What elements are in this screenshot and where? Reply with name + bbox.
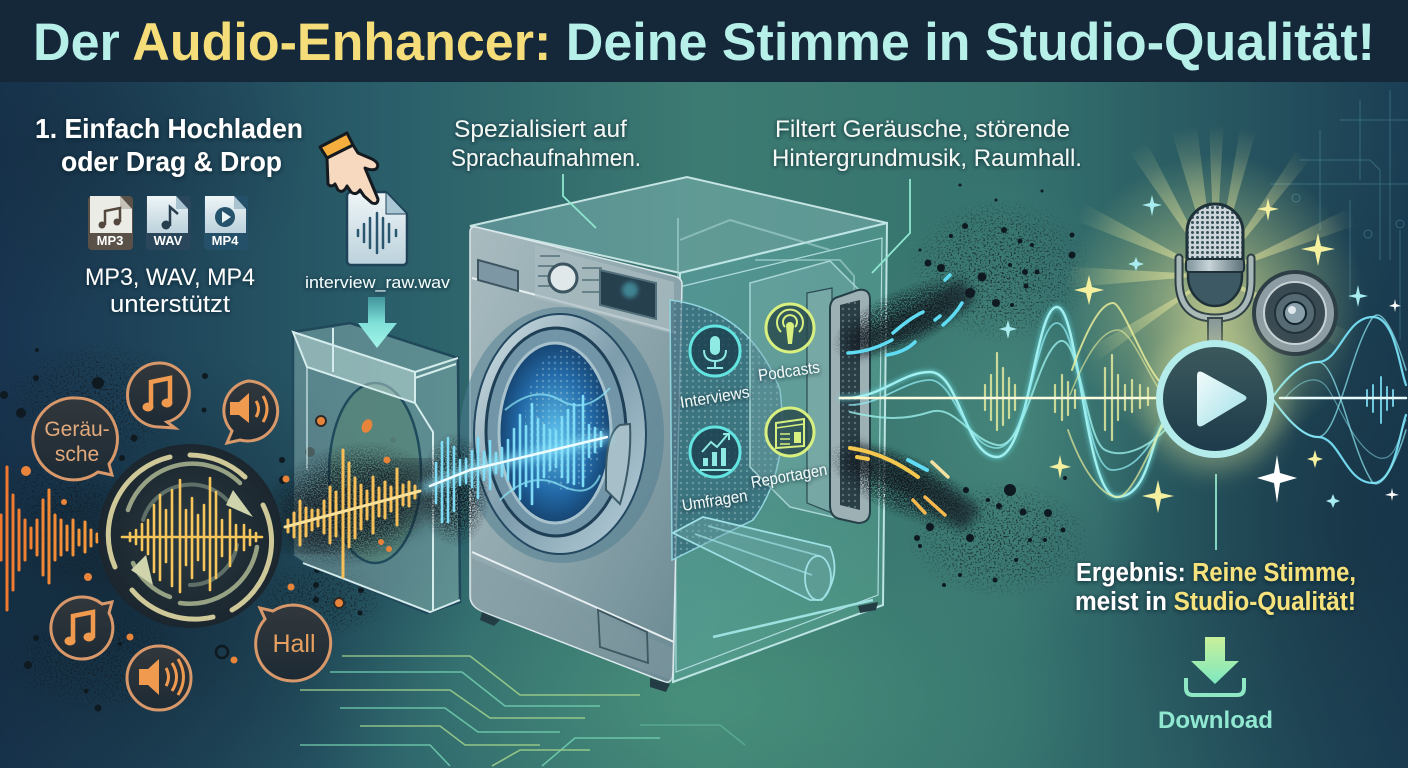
drum mesh	[670, 300, 782, 560]
bubble: Geräusche: sche	[55, 443, 99, 466]
filter unit	[750, 261, 870, 523]
icon: podcasts	[766, 304, 814, 352]
waveform: through machine	[285, 396, 607, 577]
bubble: music lower	[51, 597, 113, 659]
category labels: Reportagen	[750, 461, 829, 492]
icon: WAV: WAV	[154, 233, 183, 248]
circuit lines bottom	[300, 656, 745, 766]
callout: speech recordings: Spezialisiert auf	[454, 116, 627, 143]
orange noise dots	[21, 416, 392, 664]
machine feet	[480, 602, 878, 692]
washing machine	[460, 177, 887, 692]
icon: central noise disc	[98, 444, 282, 628]
drawer at bottom	[598, 610, 648, 663]
file format icons	[88, 196, 248, 250]
icon: download	[1186, 637, 1244, 695]
black splatter dots	[0, 184, 1076, 712]
text: supported formats	[85, 264, 255, 318]
callout: filter noise: Hintergrundmusik, Raumhall.	[772, 145, 1082, 172]
leader lines	[563, 174, 1216, 550]
transparent input box	[293, 323, 460, 613]
door	[460, 307, 664, 563]
dark smudge bands	[290, 290, 972, 530]
drum	[670, 300, 782, 560]
title bar: Der Audio-Enhancer: Deine Stimme in Studio-Qualität!	[33, 13, 1375, 72]
icon: reports	[766, 408, 814, 456]
download label: Download	[1158, 707, 1273, 734]
title bar	[0, 0, 1408, 82]
bubble: speaker lower	[127, 646, 191, 710]
icon: WAV	[146, 196, 191, 250]
result text	[1075, 559, 1356, 616]
dense grain smudges	[32, 278, 980, 578]
glow rays	[1040, 100, 1385, 455]
waveform: orange left	[0, 467, 98, 610]
bubble: Geräusche	[33, 398, 118, 480]
icon: pointing hand	[320, 133, 378, 204]
bubble: Hall	[256, 605, 331, 681]
grain splatter	[8, 200, 1088, 708]
bubble: Hall: Hall	[272, 630, 316, 658]
file name label: interview_raw.wav	[305, 273, 451, 292]
category icons	[690, 304, 814, 477]
category labels	[679, 359, 829, 515]
category labels: Umfragen	[681, 487, 749, 515]
machine side panel	[673, 218, 887, 682]
machine top	[470, 177, 887, 273]
ribbons leaving filter	[848, 275, 962, 515]
result text: meist in Studio-Qualität!	[1075, 588, 1356, 616]
control panel	[478, 245, 674, 334]
heading: upload step	[35, 113, 303, 177]
icon: interviews	[690, 326, 740, 376]
icon: MP3	[88, 196, 133, 250]
machine front	[470, 227, 682, 682]
heading: upload step: 1. Einfach Hochladen	[35, 113, 303, 144]
bubble: music top	[128, 363, 189, 428]
result text: Ergebnis: Reine Stimme,	[1076, 559, 1356, 587]
icon: MP3: MP3	[97, 233, 123, 248]
heading: upload step: oder Drag & Drop	[61, 146, 282, 177]
icon: audio file	[347, 192, 407, 265]
bubble: speaker top	[224, 381, 278, 443]
icon: play button	[1143, 327, 1287, 471]
icon: MP4	[204, 196, 248, 250]
text: supported formats: unterstützt	[110, 291, 230, 318]
noise speech bubbles	[33, 363, 331, 710]
bubble: Geräusche: Geräu-	[44, 418, 110, 441]
category labels: Podcasts	[757, 359, 821, 385]
callout: speech recordings	[451, 116, 641, 172]
icon: surveys	[690, 427, 740, 477]
text: supported formats: MP3, WAV, MP4	[85, 264, 255, 291]
icon: studio microphone	[1179, 204, 1251, 346]
icon: MP4: MP4	[212, 233, 239, 248]
arrow down into box	[358, 297, 397, 348]
category labels: Interviews	[679, 383, 751, 412]
sparkles	[999, 195, 1401, 513]
circuit lines top right	[1270, 90, 1408, 340]
icon: speaker	[1254, 272, 1336, 354]
callout: filter noise	[772, 116, 1082, 172]
rolled filter roll	[673, 517, 834, 600]
clean wave right	[840, 303, 1406, 497]
callout: speech recordings: Sprachaufnahmen.	[451, 145, 641, 172]
callout: filter noise: Filtert Geräusche, störende	[775, 116, 1070, 143]
